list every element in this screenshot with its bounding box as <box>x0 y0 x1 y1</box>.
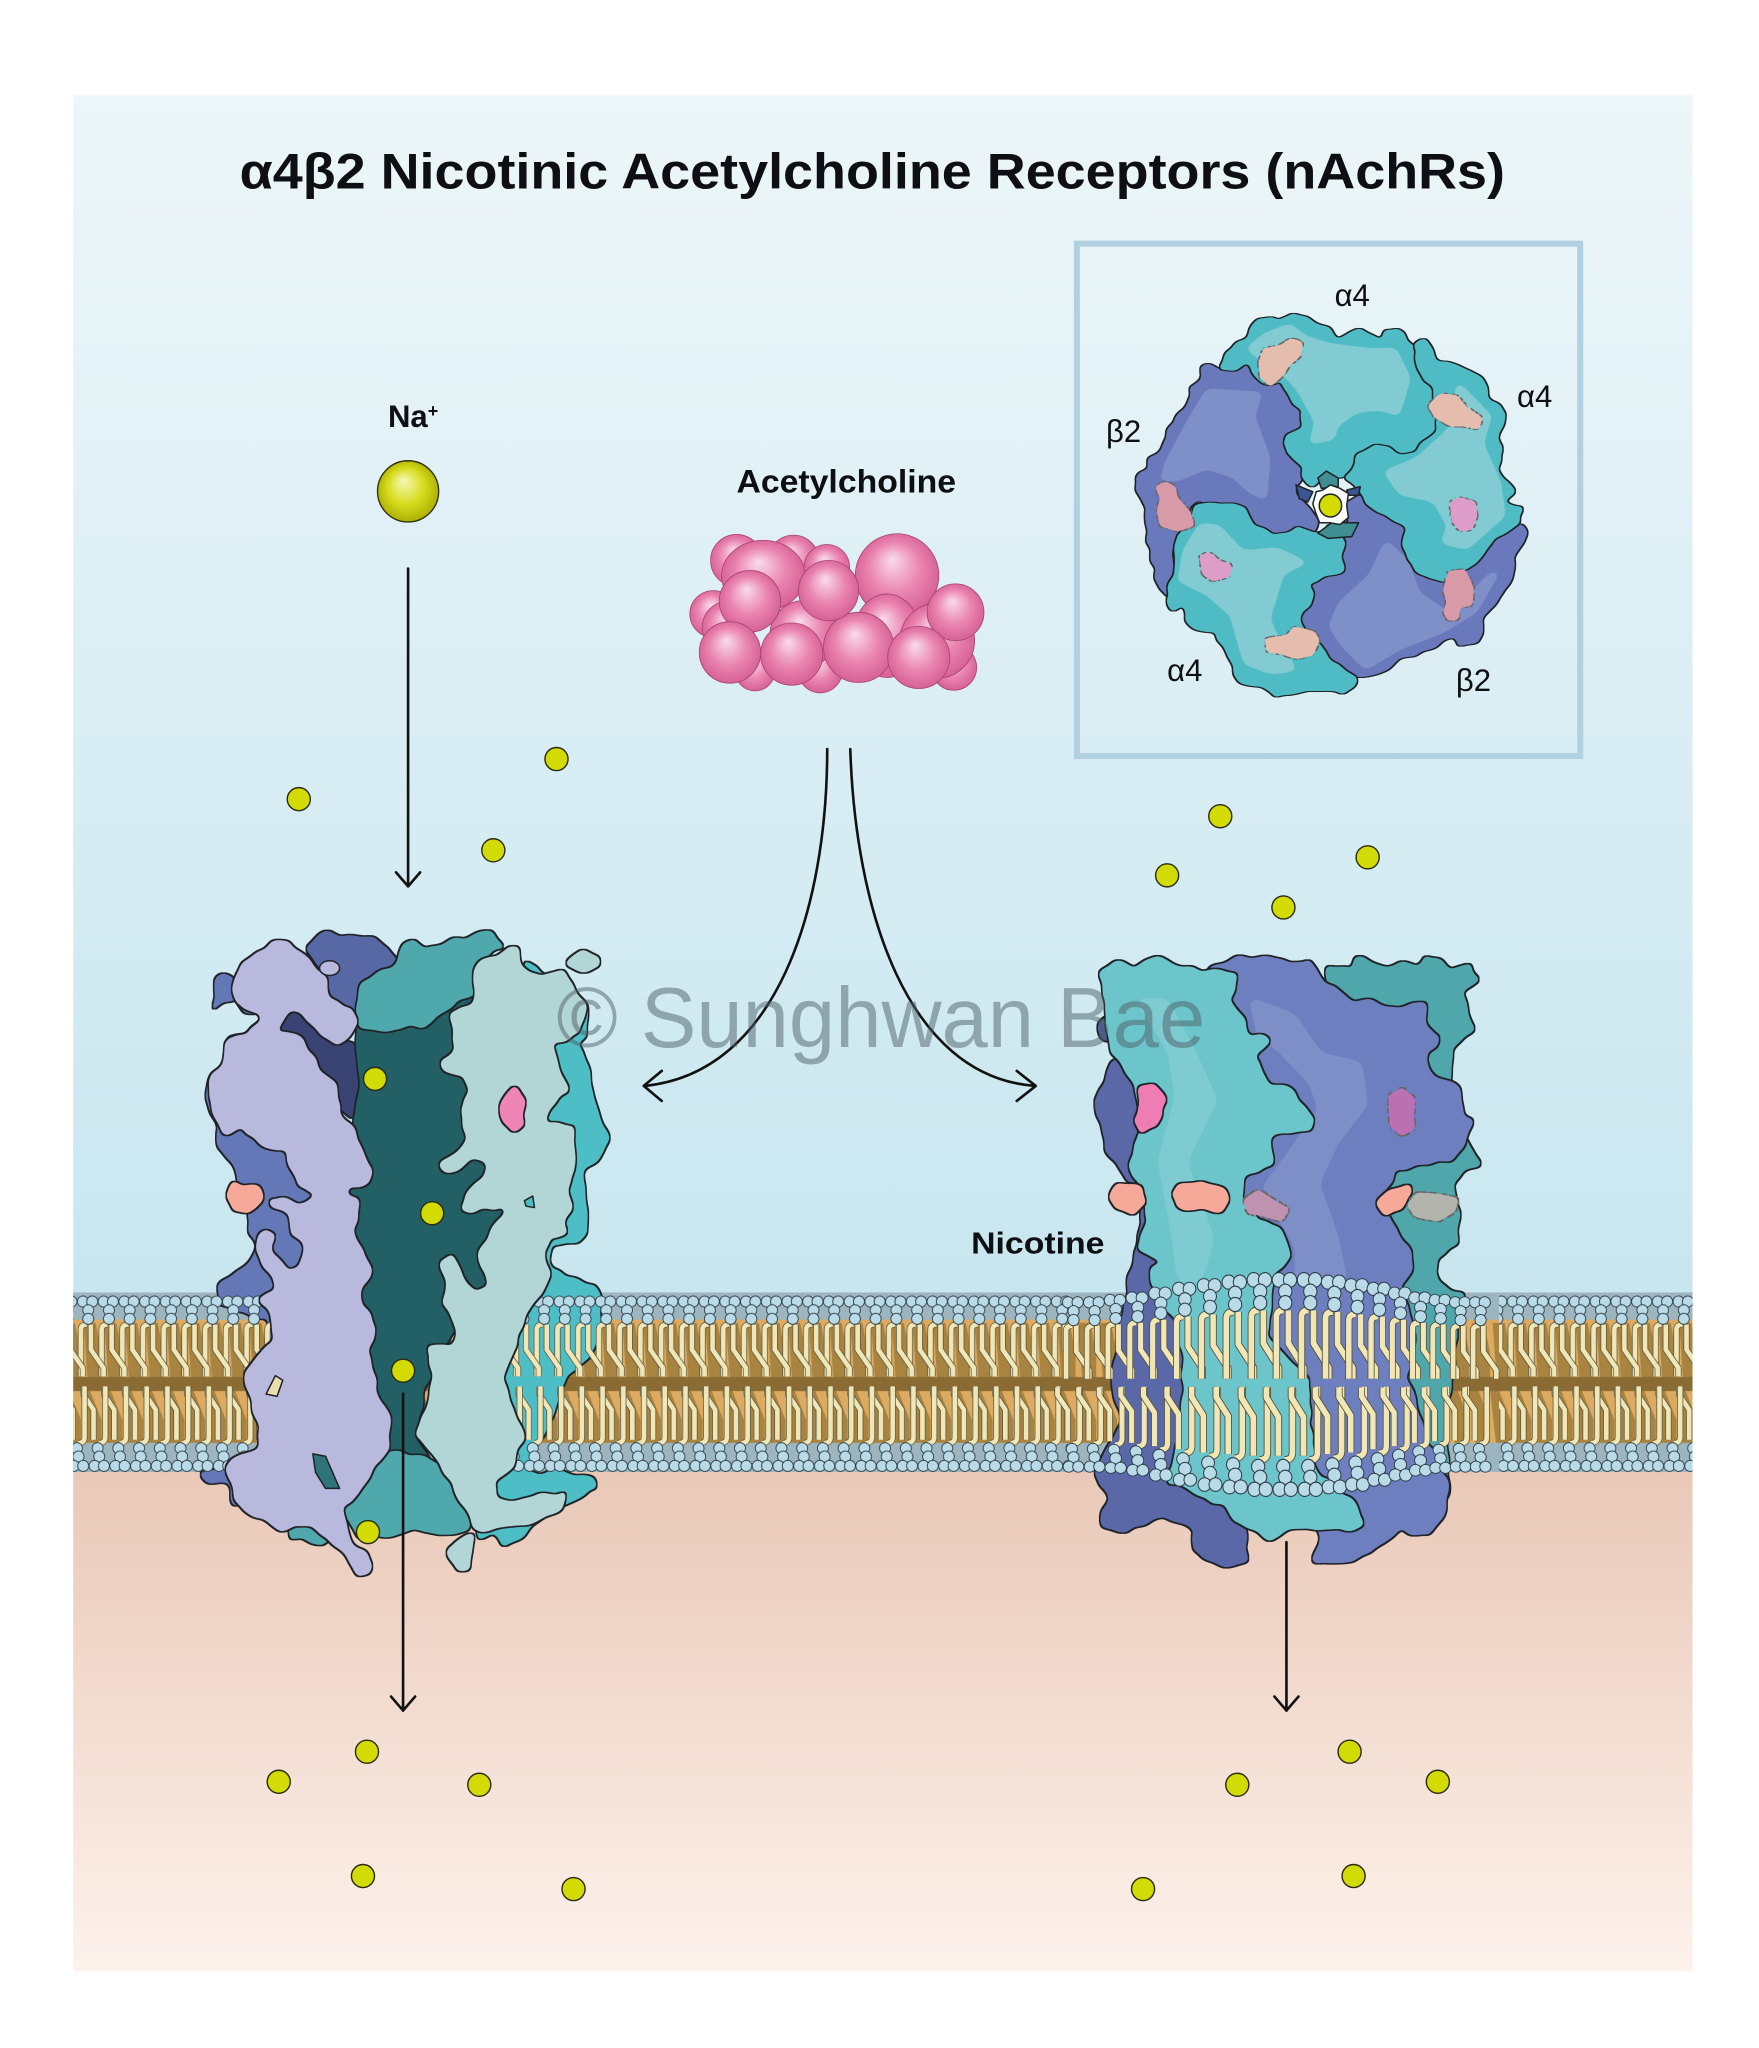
subunit: alpha4 right <box>1342 340 1523 581</box>
hole in lavender subunit <box>313 1454 340 1488</box>
central pore with sodium ion <box>1296 471 1360 538</box>
label: sodium ion: Na <box>388 399 428 434</box>
small hole with lipid <box>266 1376 283 1396</box>
receptor right <box>1094 953 1482 1568</box>
dark blue bump <box>1099 1015 1120 1043</box>
front cyan subunit <box>1101 955 1365 1544</box>
navy inner wall <box>275 1005 362 1122</box>
labels: top view subunits: β2 <box>1456 663 1491 698</box>
dark teal pore channel <box>346 989 506 1477</box>
subunit: beta2 left <box>1133 362 1320 602</box>
icon: acetylcholine in binding site <box>1133 1082 1168 1133</box>
labels: top view subunits <box>1106 278 1552 698</box>
icon: acetylcholine in binding site <box>499 1086 526 1134</box>
subunit: alpha4 lower left <box>1165 502 1357 699</box>
labels: top view subunits: α4 <box>1517 379 1552 414</box>
label: acetylcholine: Acetylcholine <box>736 463 956 499</box>
labels: top view subunits: α4 <box>1335 278 1370 313</box>
dashed acetylcholine on purple <box>1388 1087 1415 1136</box>
receptor left: cutaway front <box>207 930 601 1574</box>
aqua floating lobe <box>563 950 601 975</box>
subunit: alpha4 top <box>1218 311 1438 490</box>
dashed nicotine, centre <box>1243 1190 1290 1221</box>
membrane: lipid bilayer, right section <box>1499 1287 1693 1480</box>
small cyan hole <box>524 1196 534 1208</box>
lavender bump <box>320 961 340 976</box>
aqua lower tail <box>448 1534 474 1571</box>
panel: top view inset frame <box>1077 244 1580 756</box>
title: α4β2 Nicotinic Acetylcholine Receptors (nAchRs) <box>240 144 1505 200</box>
subunit: beta2 right <box>1303 495 1530 678</box>
dashed nicotine, right <box>1407 1193 1459 1221</box>
membrane: lipid bilayer, left section <box>73 1287 1068 1480</box>
membrane: magnified lipids over right receptor, upper leaflet <box>1062 1273 1496 1379</box>
arrow: sodium through left channel <box>391 1394 415 1711</box>
arrow: below right receptor <box>1274 1542 1298 1711</box>
lower teal base <box>342 1452 473 1537</box>
receptor left: back subunits <box>199 931 611 1546</box>
icon: sodium ion sphere <box>378 461 439 522</box>
icon: acetylcholine molecule <box>690 534 984 693</box>
arrow: acetylcholine to left receptor <box>644 749 827 1101</box>
upper teal rim <box>356 930 506 1033</box>
binding patches, dashed outlines <box>1155 338 1482 659</box>
arrow: acetylcholine to right receptor <box>850 749 1036 1101</box>
label: sodium ion: + <box>428 401 438 421</box>
arrow: sodium flows down to receptor <box>396 569 420 886</box>
labels: top view subunits: α4 <box>1167 653 1202 688</box>
back dark blue subunit <box>1094 1061 1261 1568</box>
diagram: receptor top view <box>1133 311 1530 699</box>
sodium ions: in left channel <box>356 1067 444 1544</box>
labels: top view subunits: β2 <box>1106 414 1141 449</box>
sodium ions: intracellular <box>267 1740 1449 1901</box>
membrane: magnified lipids over right receptor, lower leaflet <box>1058 1387 1491 1496</box>
nicotine, centre <box>1169 1181 1231 1213</box>
label: nicotine: Nicotine <box>971 1227 1104 1260</box>
front purple subunit <box>1206 957 1474 1564</box>
subunit cut: lavender <box>207 938 391 1574</box>
cyan lighter interior <box>1134 998 1218 1283</box>
nicotine, left <box>1107 1182 1147 1216</box>
purple lighter interior <box>1248 996 1368 1283</box>
small teal fragment <box>285 1518 336 1548</box>
back teal subunit <box>1327 953 1482 1544</box>
nicotine, right <box>1376 1181 1412 1218</box>
sodium ions: extracellular <box>287 748 1379 919</box>
watermark: © Sunghwan Bae <box>556 971 1205 1066</box>
icon: nicotine on receptor <box>224 1180 263 1214</box>
subunit cut: pale aqua <box>416 943 586 1532</box>
